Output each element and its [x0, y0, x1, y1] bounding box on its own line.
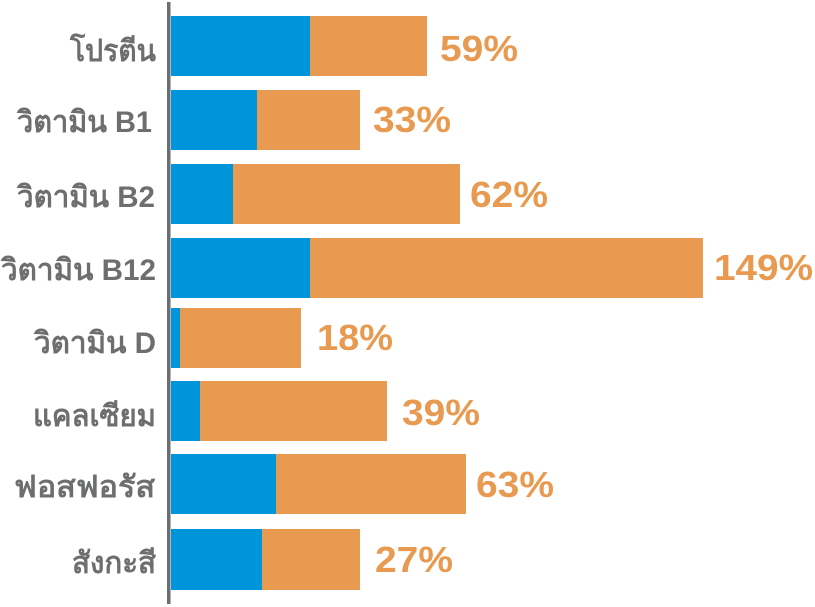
row: vitamin B12: วิตามิน B12 — [0, 254, 156, 287]
row: vitamin B1 — [16, 90, 451, 150]
row: protein: โปรตีน — [69, 32, 156, 68]
row: zinc — [72, 529, 453, 590]
row: calcium: แคลเซียม — [33, 400, 156, 433]
row: vitamin B1: วิตามิน B1 — [16, 106, 152, 139]
row: vitamin D: วิตามิน D — [33, 327, 156, 360]
row: vitamin B12: 149% — [714, 247, 813, 288]
row: zinc: 27% — [375, 539, 453, 580]
row: vitamin B2: วิตามิน B2 — [16, 181, 155, 214]
row: vitamin B2: 62% — [470, 174, 548, 215]
axis line — [167, 2, 170, 604]
row: zinc: สังกะสี — [72, 547, 157, 580]
row: calcium: 39% — [402, 392, 480, 433]
row: vitamin D: 18% — [317, 317, 393, 358]
row: vitamin B1: 33% — [373, 99, 451, 140]
row: phosphorus — [14, 454, 554, 514]
row: vitamin D — [33, 308, 393, 368]
row: vitamin B12 — [0, 238, 813, 298]
row: protein: 59% — [440, 28, 518, 69]
row: vitamin B2 — [16, 164, 548, 224]
row: protein — [69, 16, 518, 76]
row: phosphorus: 63% — [476, 464, 554, 505]
row: phosphorus: ฟอสฟอรัส — [14, 471, 156, 504]
row: calcium — [33, 381, 480, 441]
